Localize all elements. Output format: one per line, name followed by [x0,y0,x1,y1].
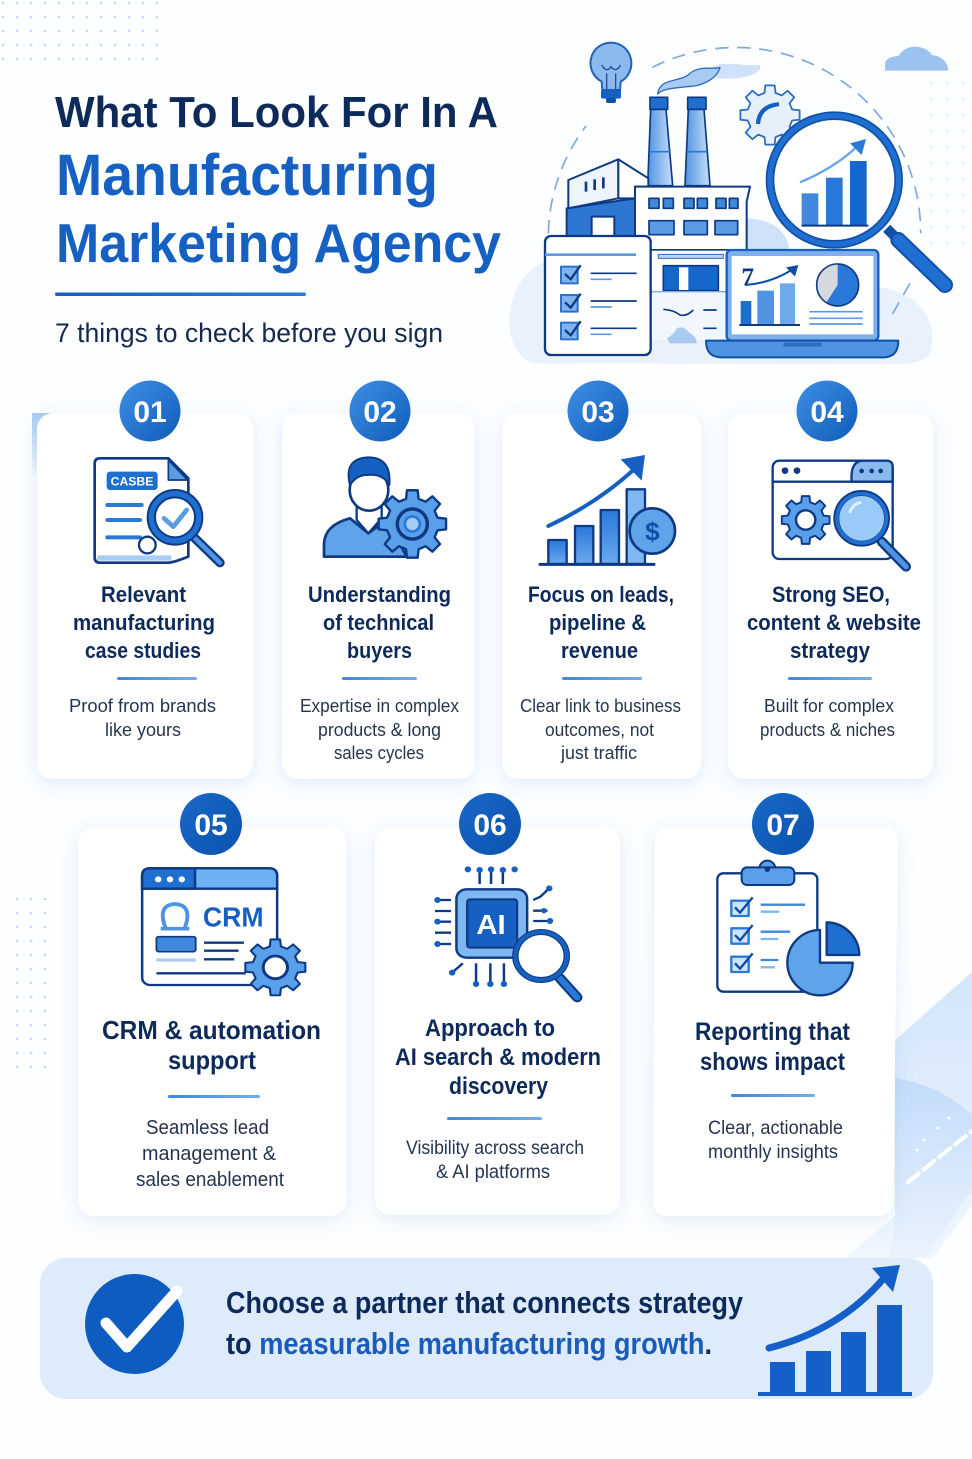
card 03 heading [528,582,674,663]
hero illustration: factory, checklist, laptop, magnifier [509,43,948,364]
badge 05 [180,793,242,855]
title: Manufacturing [56,143,438,208]
card 06 description: & AI platforms [436,1162,550,1183]
card 05 description: management & [142,1143,277,1165]
icon: browser gear and magnifier [773,461,906,567]
card 02 description: Expertise in complex [300,696,459,716]
badge 06 [459,793,521,855]
card 03 heading: revenue [561,638,638,663]
card 03 description: just traffic [560,743,637,763]
card 05 description: sales enablement [136,1169,284,1191]
card 01 description [69,696,216,740]
panel: card 05 crm and automation [78,793,347,1216]
card 06 description [406,1138,584,1183]
card 02 description: sales cycles [334,743,424,763]
subtitle: 7 things to check before you sign [55,318,443,348]
card 02 heading: of technical [323,610,434,635]
card 07 heading: shows impact [700,1048,846,1076]
panel: bottom call-out banner [40,1258,933,1399]
card 01 description: like yours [105,720,181,740]
icon: growth bars with arrow [758,1265,912,1394]
card 03 description: outcomes, not [545,720,654,740]
card 05 description [136,1117,284,1191]
icon: case study document [95,458,220,563]
icon: AI chip with magnifier [434,866,577,997]
icon: chimneys [648,97,710,186]
icon: AI chip with magnifier: AI [476,910,506,941]
card 02 description [300,696,459,763]
card 07 description: Clear, actionable [708,1118,843,1139]
card 07 description: monthly insights [708,1142,838,1163]
panel: card 01 relevant case studies [32,380,253,779]
card 01 heading: manufacturing [73,610,215,635]
badge 01: 01 [133,396,167,429]
card 03 heading: Focus on leads, [528,582,674,607]
panel: card 06 AI search [375,793,620,1215]
badge 05: 05 [194,809,228,842]
card 05 heading: CRM & automation [102,1015,321,1045]
badge 02: 02 [363,396,397,429]
icon: laptop with dashboard [706,250,898,357]
badge 04: 04 [810,396,844,429]
badge 07: 07 [766,809,800,842]
card 05 description: Seamless lead [146,1117,269,1139]
icon: check circle [85,1274,184,1374]
call-out text [226,1285,744,1361]
icon: magnifier with chart [770,116,945,285]
icon: light bulb [590,43,631,103]
card 01 heading: Relevant [101,582,187,607]
badge 03: 03 [581,396,615,429]
icon: main factory building [635,187,790,343]
call-out text: to measurable manufacturing growth. [226,1326,712,1361]
title: What To Look For In A [55,88,498,137]
card 01 heading [73,582,215,663]
badge 02 [350,380,410,442]
icon: growth chart with dollar coin [540,455,675,564]
title [55,88,501,274]
card 02 heading: Understanding [308,582,451,607]
icon: CRM window with gear: CRM [203,903,264,933]
icon: growth chart with dollar coin: $ [645,516,660,546]
badge 07 [752,793,814,855]
card 02 heading [308,582,451,663]
card 06 heading: Approach to [425,1015,555,1042]
card 04 heading: Strong SEO, [772,582,890,607]
card 01 heading: case studies [85,638,201,663]
card 05 heading: support [168,1045,256,1075]
icon: gear [740,85,800,145]
card 03 description: Clear link to business [520,696,681,716]
icon: CRM window with gear [142,868,305,995]
call-out text: Choose a partner that connects strategy [226,1285,744,1320]
icon: cloud [885,47,948,71]
card 07 description [708,1118,843,1163]
badge 01 [120,380,180,442]
card 04 heading: content & website [747,610,921,635]
card 03 description [520,696,681,763]
card 02 heading: buyers [347,638,412,663]
card 06 heading [395,1015,601,1100]
icon: laptop with dashboard: 7 [741,263,754,291]
icon: smoke [658,64,760,94]
panel: card 02 technical buyers [282,380,475,779]
card 04 description: products & niches [760,720,895,740]
panel: card 03 leads pipeline revenue [502,380,701,779]
badge 03 [568,380,628,442]
icon: person with gear [324,457,446,558]
badge 04 [796,380,858,442]
icon: checklist [545,236,651,355]
icon: left factory building [567,159,648,238]
card 04 description [760,696,895,740]
card 04 heading [747,582,921,663]
card 06 heading: AI search & modern [395,1044,601,1071]
card 05 heading [102,1015,321,1075]
title: Marketing Agency [56,212,501,274]
icon: clipboard with pie chart [717,861,859,995]
card 04 heading: strategy [790,638,871,663]
card 04 description: Built for complex [764,696,894,716]
card 06 heading: discovery [449,1073,549,1100]
card 07 heading [695,1018,851,1076]
panel: card 04 seo content website [728,380,933,779]
card 01 description: Proof from brands [69,696,216,716]
panel: card 07 reporting [653,793,898,1216]
card 06 description: Visibility across search [406,1138,584,1159]
card 07 heading: Reporting that [695,1018,851,1046]
badge 06: 06 [473,809,507,842]
card 03 heading: pipeline & [549,610,646,635]
icon: case study document: CASBE [111,474,153,488]
card 02 description: products & long [318,720,441,740]
